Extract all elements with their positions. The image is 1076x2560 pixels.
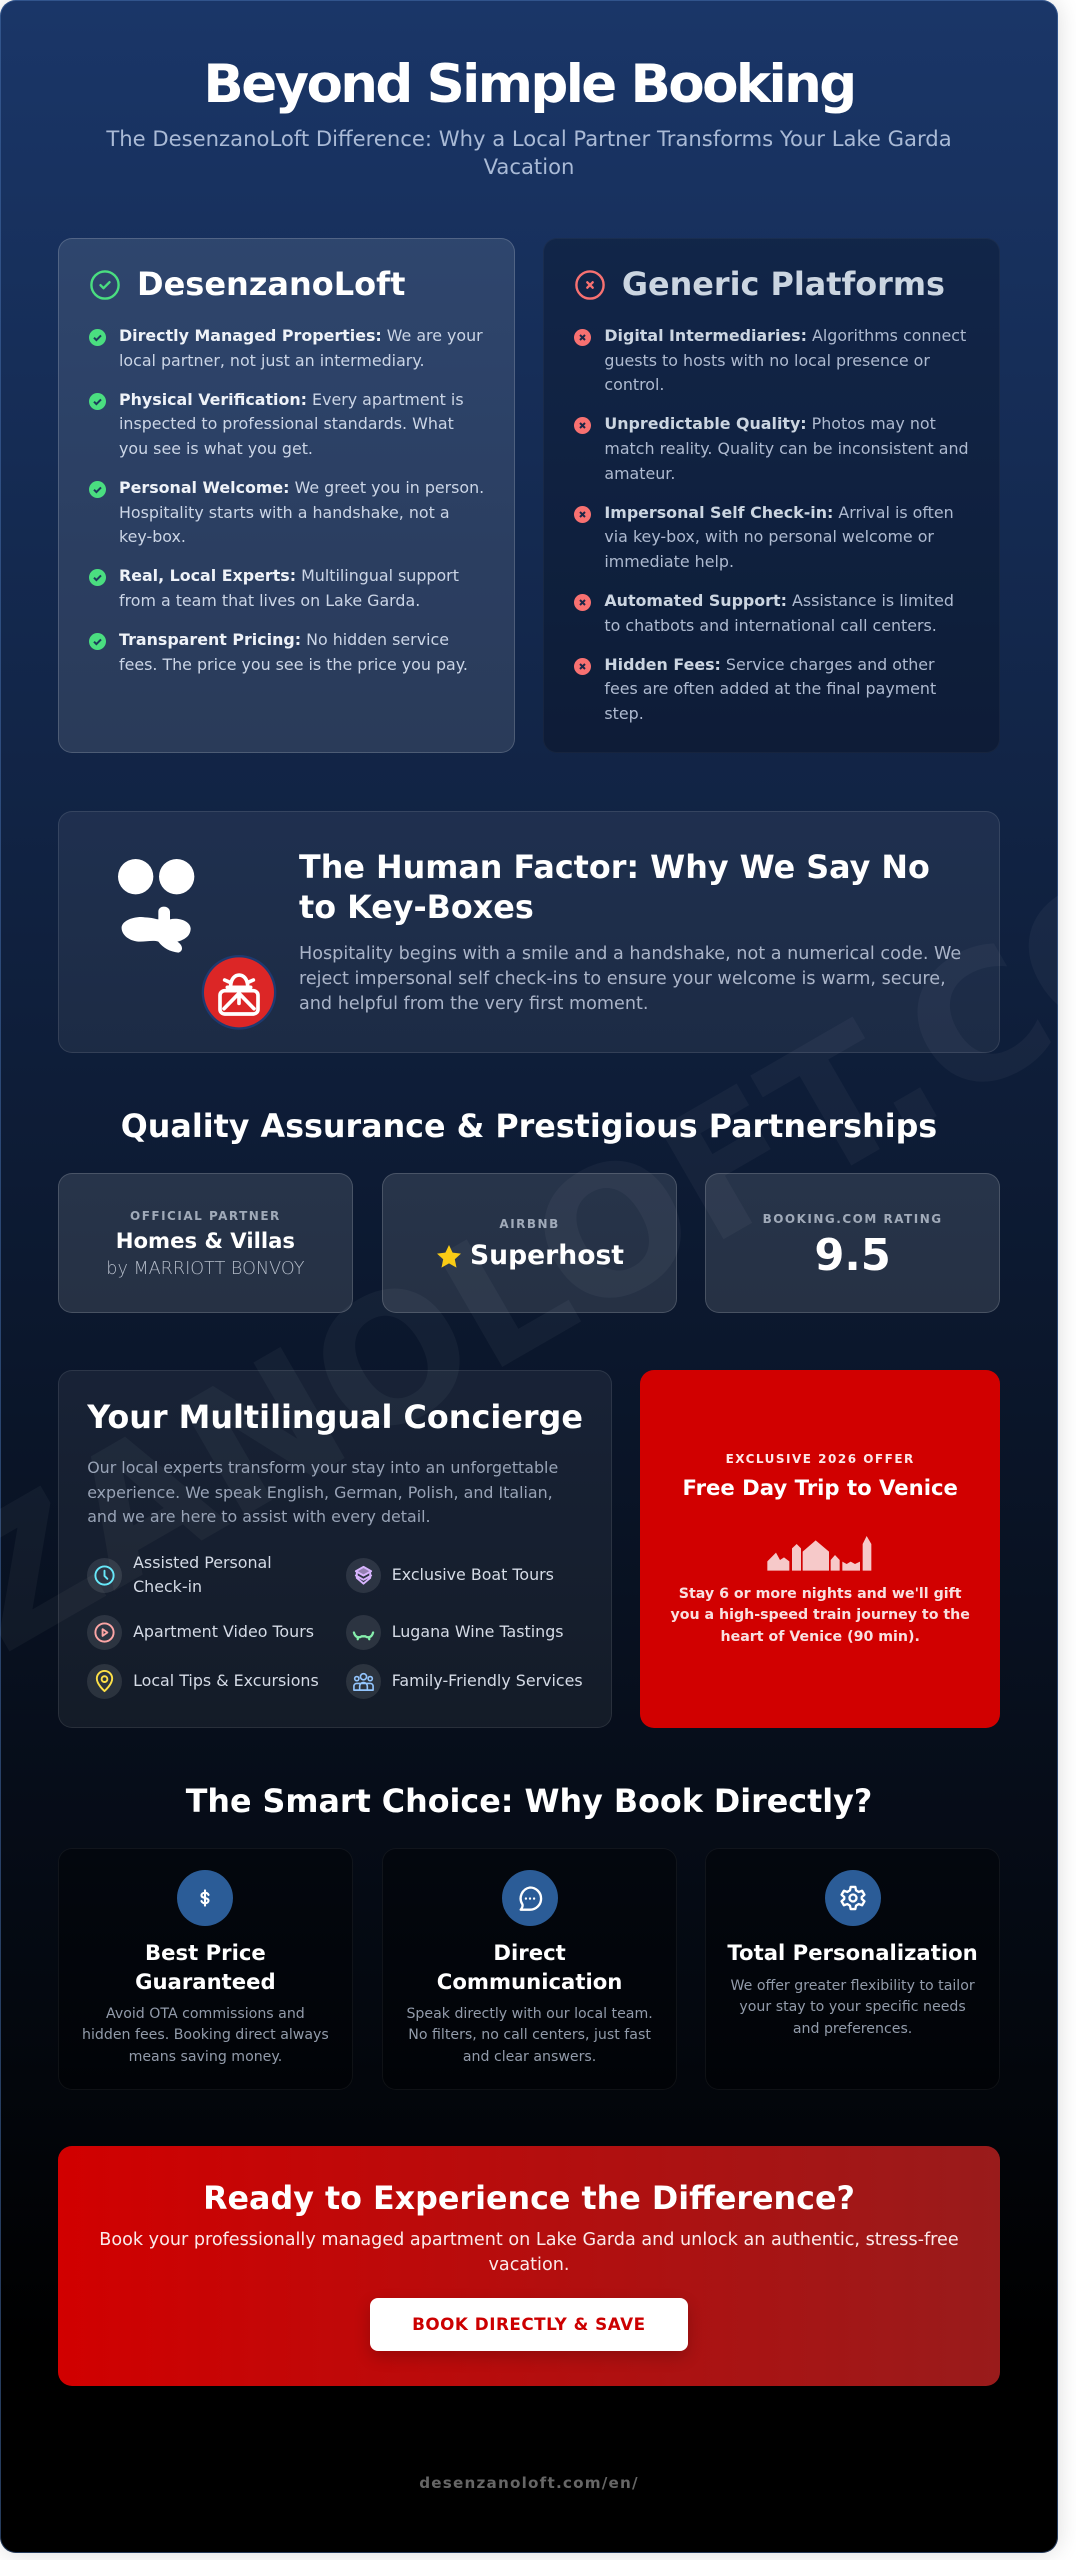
icon: gear [825, 1870, 881, 1926]
heading: concierge: Your Multilingual Concierge [87, 1398, 583, 1436]
drawbacks list: step. [604, 704, 644, 723]
card heading: Total Personalization [727, 1940, 978, 1965]
title: Beyond Simple Booking [203, 54, 855, 115]
icon: red cross ring [575, 270, 605, 300]
CTA button: BOOK DIRECTLY & SAVE [412, 2314, 646, 2334]
card: Homes & Villas [58, 1173, 353, 1313]
icon: chat bubble [502, 1870, 558, 1926]
panel: The Human Factor [58, 811, 1000, 1053]
partner name: Homes & Villas [116, 1228, 295, 1253]
drawbacks list: guests to hosts with no local presence or [604, 351, 930, 370]
text: human factor: Hospitality begins with a smile and a handshake, not a numerical code. We [299, 944, 961, 964]
advantages list: Real, Local Experts: Multilingual support [119, 566, 459, 585]
drawbacks list: via key-box, with no personal welcome or [604, 527, 934, 546]
card text: We offer greater flexibility to tailor [730, 1978, 975, 1994]
heading: human factor [299, 849, 930, 926]
icon: clock [87, 1558, 122, 1593]
panel: Venice offer [640, 1370, 1000, 1728]
heading: partnerships: Quality Assurance & Prestigious Partnerships [121, 1109, 937, 1145]
subtitle: Vacation [484, 154, 574, 179]
panel: DesenzanoLoft [58, 238, 515, 753]
card heading [437, 1940, 622, 1994]
text: concierge: Our local experts transform your stay into an unforgettable [87, 1458, 558, 1477]
advantages list: from a team that lives on Lake Garda. [119, 591, 420, 610]
offer text: Stay 6 or more nights and we'll gift [679, 1586, 962, 1602]
icon: star [437, 1245, 461, 1268]
CTA heading: Ready to Experience the Difference? [203, 2181, 855, 2217]
service: video tours [87, 1615, 314, 1650]
card text: and clear answers. [463, 2049, 596, 2065]
icon: play [87, 1614, 122, 1650]
label: BOOKING.COM RATING [763, 1212, 943, 1226]
card text: and preferences. [793, 2021, 912, 2037]
card heading [135, 1940, 276, 1994]
offer heading: Free Day Trip to Venice [682, 1475, 958, 1500]
label: OFFICIAL PARTNER [130, 1209, 281, 1223]
card heading: Best Price [145, 1940, 266, 1965]
card: personalization [705, 1848, 1000, 2090]
CTA text [99, 2230, 959, 2274]
service: local tips [87, 1664, 319, 1699]
heading: Generic Platforms: Generic Platforms [622, 265, 945, 303]
heading: why book directly: The Smart Choice: Why Book Directly? [186, 1784, 872, 1820]
card text: Speak directly with our local team. [406, 2006, 653, 2022]
advantages list [89, 326, 484, 674]
label: Apartment Video Tours [133, 1622, 314, 1641]
advantages list: Transparent Pricing: No hidden service [119, 630, 449, 649]
card text: hidden fees. Booking direct always [82, 2027, 329, 2043]
drawbacks list: amateur. [604, 464, 675, 483]
offer label: EXCLUSIVE 2026 OFFER [726, 1452, 915, 1466]
panel: Generic Platforms [543, 238, 1000, 753]
advantages list: fees. The price you see is the price you pay. [119, 655, 468, 674]
CTA button [370, 2298, 688, 2351]
subtitle: The DesenzanoLoft Difference: Why a Local Partner Transforms Your Lake Garda [106, 126, 952, 151]
offer text: heart of Venice (90 min). [720, 1628, 920, 1644]
text: concierge: experience. We speak English, German, Polish, and Italian, [87, 1483, 553, 1502]
card text [406, 2006, 653, 2065]
card text: means saving money. [129, 2049, 282, 2065]
card text [730, 1978, 975, 2037]
drawbacks list: Automated Support: Assistance is limited [604, 591, 954, 610]
advantages list: Directly Managed Properties: We are your [119, 326, 483, 345]
card heading: Direct [493, 1940, 566, 1965]
card text [82, 2006, 329, 2065]
text: human factor [299, 944, 961, 1014]
card: direct communication [382, 1848, 677, 2090]
icon: Venice skyline [767, 1536, 872, 1571]
card heading: Guaranteed [135, 1969, 276, 1994]
text: human factor: reject impersonal self check-ins to ensure your welcome is warm, secure, [299, 969, 946, 989]
card text: your stay to your specific needs [739, 1999, 966, 2015]
label: Family-Friendly Services [392, 1671, 583, 1690]
label: AIRBNB [499, 1217, 560, 1231]
label: Assisted Personal [133, 1553, 272, 1572]
icon: map pin [87, 1664, 122, 1699]
label: Local Tips & Excursions [133, 1671, 319, 1690]
card: Booking rating [705, 1173, 1000, 1313]
subtitle [106, 126, 952, 179]
heading: human factor: to Key-Boxes [299, 889, 534, 926]
advantages list: you see is what you get. [119, 439, 313, 458]
partner brand: by MARRIOTT BONVOY [106, 1259, 305, 1279]
icon: people [346, 1664, 381, 1699]
drawbacks list: control. [604, 375, 664, 394]
drawbacks list: match reality. Quality can be inconsistent and [604, 439, 969, 458]
icon: dollar [177, 1870, 233, 1926]
advantages list: key-box. [119, 527, 186, 546]
label: Exclusive Boat Tours [392, 1565, 554, 1584]
drawbacks list: to chatbots and international call centers. [604, 616, 937, 635]
advantages list: Physical Verification: Every apartment is [119, 390, 464, 409]
icon: two people shaking hands [118, 859, 276, 1030]
card heading: Communication [437, 1969, 622, 1994]
text: human factor: and helpful from the very first moment. [299, 994, 649, 1014]
superhost: Superhost [470, 1240, 624, 1271]
CTA text: vacation. [489, 2254, 569, 2274]
advantages list: inspected to professional standards. What [119, 414, 454, 433]
card: best price [58, 1848, 353, 2090]
drawbacks list [574, 326, 969, 723]
service: boat tours [346, 1558, 554, 1593]
card text: No filters, no call centers, just fast [408, 2027, 651, 2043]
icon: green check ring [90, 270, 120, 300]
card: Airbnb [382, 1173, 677, 1313]
label: Lugana Wine Tastings [392, 1622, 564, 1641]
icon: boat [346, 1558, 381, 1593]
drawbacks list: fees are often added at the final payment [604, 679, 936, 698]
heading: DesenzanoLoft: DesenzanoLoft [137, 265, 405, 303]
text: concierge: and we are here to assist with every detail. [87, 1507, 431, 1526]
card text: Avoid OTA commissions and [106, 2006, 305, 2022]
drawbacks list: Hidden Fees: Service charges and other [604, 655, 935, 674]
service: wine [346, 1615, 564, 1650]
advantages list: local partner, not just an intermediary. [119, 351, 424, 370]
footer link: desenzanoloft.com/en/ [419, 2474, 639, 2492]
text: concierge [87, 1458, 558, 1526]
offer text: you a high-speed train journey to the [670, 1607, 970, 1623]
rating value: 9.5 [814, 1231, 891, 1281]
service: family [346, 1664, 583, 1699]
call to action [58, 2146, 1000, 2386]
advantages list: Hospitality starts with a handshake, not a [119, 503, 450, 522]
drawbacks list: Unpredictable Quality: Photos may not [604, 414, 936, 433]
offer text [670, 1586, 970, 1644]
CTA text: Book your professionally managed apartment on Lake Garda and unlock an authentic, stress-free [99, 2230, 959, 2250]
drawbacks list: Impersonal Self Check-in: Arrival is often [604, 503, 954, 522]
label: Check-in [133, 1577, 202, 1596]
drawbacks list: immediate help. [604, 552, 734, 571]
heading: human factor: The Human Factor: Why We Say No [299, 849, 930, 886]
panel: Multilingual Concierge [58, 1370, 612, 1728]
service: check-in [87, 1553, 272, 1596]
label [133, 1553, 272, 1596]
drawbacks list: Digital Intermediaries: Algorithms connect [604, 326, 966, 345]
icon: wine glasses [346, 1614, 381, 1650]
advantages list: Personal Welcome: We greet you in person. [119, 478, 484, 497]
